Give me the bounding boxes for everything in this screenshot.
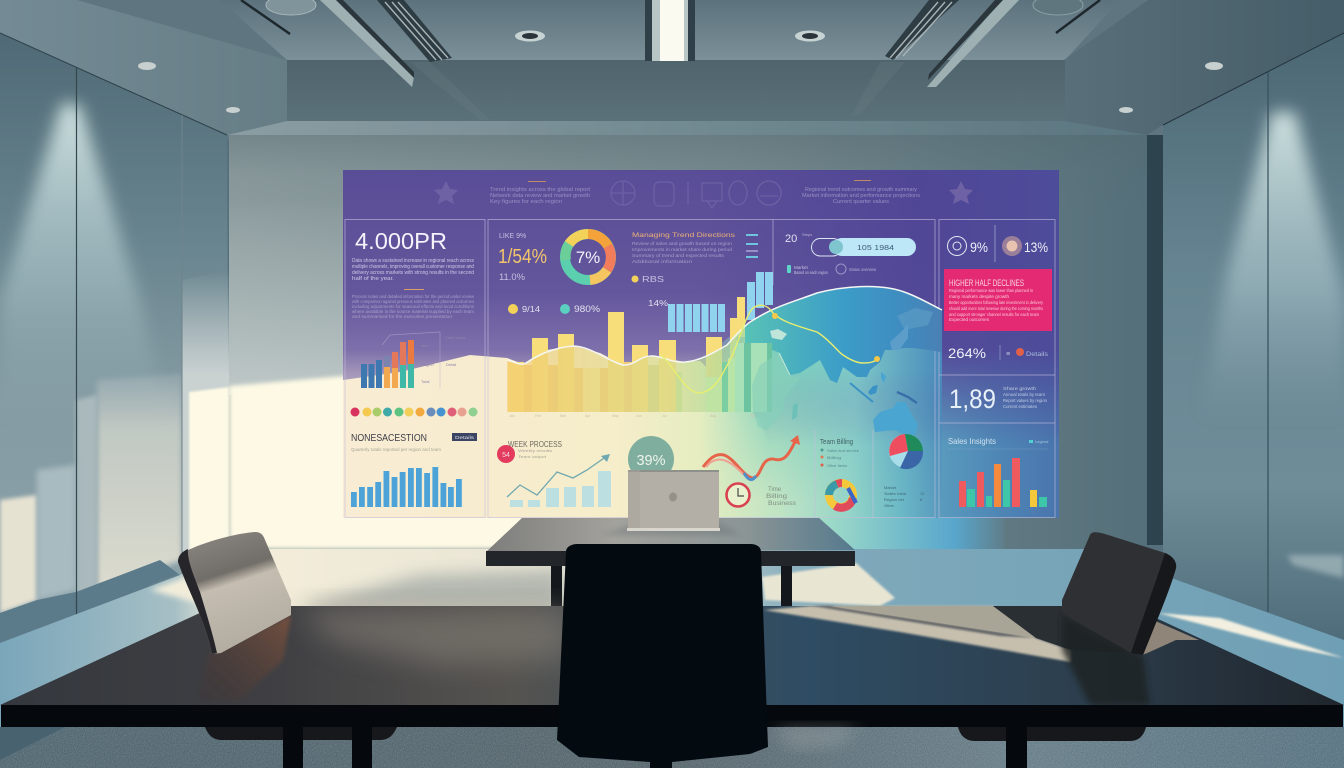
light blue tall bars [747, 272, 773, 320]
left card: headline: including adjustments for seasonal effects and local conditions [352, 304, 475, 309]
left card: headline: half of the year. [352, 276, 395, 282]
back wall [229, 135, 1163, 550]
ceiling downlights [138, 0, 1223, 113]
left wall panels [0, 33, 229, 643]
table legs and under-chair bases [205, 727, 1146, 768]
small data table [884, 485, 925, 508]
pink callout: Better opportunities following late investment in delivery [949, 300, 1044, 305]
pale blue mini bars [668, 304, 725, 332]
left card: mini stacked bar chart [361, 332, 466, 388]
toggle control: 105 1984 [857, 243, 894, 252]
wave arrow chart [703, 435, 800, 480]
legend dots: 980% [574, 304, 600, 314]
axis ticks: Jul [662, 414, 667, 418]
right column: percent icons: 13% [1024, 239, 1048, 255]
small data table: Sales total [884, 491, 906, 496]
right column: 264% stat: Details [1026, 352, 1048, 358]
middle card: top statistic: LIKE 9% [499, 233, 526, 240]
axis ticks: May [612, 414, 619, 418]
pink callout: and support stronger channel results for each team [949, 312, 1039, 317]
left card: headline: with comparison against previous estimates and planned outcomes [352, 299, 475, 304]
left card: headline: delivery across markets with strong results in the second [352, 270, 474, 276]
left card: mini stacked bar chart: Item [421, 343, 429, 348]
header text right [802, 180, 921, 205]
small data table: 12 [920, 491, 925, 496]
time list [766, 487, 796, 507]
time list: Time [768, 487, 782, 493]
laptop [627, 470, 720, 531]
panel frames [345, 219, 1055, 518]
toggle control [785, 232, 916, 275]
left card: lower heading [351, 433, 477, 452]
ceiling light strip [645, 0, 695, 61]
dark yellow bars [524, 362, 659, 412]
panel header band [434, 180, 973, 208]
left card: headline [352, 228, 475, 319]
right column: 1,89 stat: Current estimates [1003, 404, 1038, 409]
ceiling [0, 0, 1344, 140]
white curve [507, 286, 942, 365]
ceiling vents and slots [241, 0, 1100, 87]
right column: 1,89 stat: Report values by region [1003, 398, 1047, 403]
right column: sales bar chart: Legend [1035, 439, 1048, 444]
left card: headline: Process notes and detailed information for the period under review [352, 294, 475, 299]
pink callout [944, 269, 1052, 331]
pink callout: HIGHER HALF DECLINES [949, 278, 1024, 288]
legend dots [508, 275, 668, 314]
legend dots: RBS [642, 275, 664, 284]
right column: 1,89 stat: Share growth [1003, 386, 1037, 391]
time list: Business [768, 501, 796, 507]
axis ticks: Aug [710, 414, 716, 418]
week process chart: 54 [502, 452, 510, 459]
left card: headline: multiple channels, improving overall customer response and [352, 264, 474, 270]
right column: 1,89 stat: 1,89 [949, 384, 996, 414]
middle card: trend directions text: Summary of trend and expected results [632, 253, 725, 258]
clock icon [726, 484, 750, 506]
pink callout: should add more total revenue during the coming months [949, 306, 1044, 311]
axis ticks: Jan [509, 414, 515, 418]
left card: lower heading: Details [455, 435, 475, 440]
header star right [949, 181, 973, 204]
carpet [0, 727, 1344, 768]
multi colour donut [829, 483, 856, 508]
week process chart: Weekly results [518, 448, 552, 453]
axis ticks [509, 414, 756, 418]
legend dots: 14% [648, 299, 668, 308]
small data table: 8 [920, 497, 923, 502]
time list: Billing [766, 494, 787, 500]
axis ticks: Feb [535, 414, 541, 418]
header text left: Trend insights across the global report [490, 187, 591, 193]
left card: lower heading: NONESACESTION [351, 433, 427, 444]
right column: percent icons: 9% [970, 239, 988, 255]
header text right: Regional trend outcomes and growth summary [805, 187, 918, 193]
week process chart [497, 440, 611, 507]
middle card: top statistic: 1/54% [498, 246, 547, 268]
left card: mini stacked bar chart: Chart notes [445, 335, 466, 340]
right column: 1,89 stat [949, 384, 1047, 414]
header text left [490, 181, 591, 205]
axis ticks: Jun [636, 414, 642, 418]
pink callout: Expected outcomes [949, 317, 990, 322]
green bars [676, 343, 772, 412]
header text left: Key figures for each region [490, 199, 562, 205]
axis ticks: Mar [560, 414, 567, 418]
left card: headline: and summarised for the executive presentation [352, 314, 453, 319]
middle card: trend directions text: Improvements in market share during period [632, 247, 733, 252]
team billing list [820, 437, 860, 468]
header text right: Market information and performance projections [802, 193, 921, 199]
small data table: Other [884, 503, 895, 508]
team billing list: Team Billing [820, 437, 853, 446]
week process chart: WEEK PROCESS [508, 440, 562, 449]
table front edge [1, 705, 1343, 727]
toggle control: Based on each region [794, 270, 828, 275]
left card: mini stacked bar chart: Region [421, 362, 434, 367]
right column: sales bar chart: Sales Insights [948, 437, 996, 446]
header text left: Network data review and market growth [490, 193, 590, 199]
donut chart [565, 234, 611, 280]
middle card: trend directions text: Review of sales and growth based on region [632, 241, 733, 246]
pink callout: Regional performance was lower than planned in [949, 288, 1033, 293]
left card: colour dot row [350, 408, 478, 416]
header icons [611, 181, 781, 208]
toggle control: 20 [785, 233, 797, 245]
land mass behind bars [745, 286, 942, 383]
right column: 1,89 stat: Annual totals by team [1003, 392, 1045, 397]
right chair [1062, 532, 1176, 655]
week process chart: Team output [518, 454, 547, 459]
middle card: trend directions text: Managing Trend Directions [632, 232, 736, 239]
left card: headline: Data shows a sustained increase in regional reach across [352, 258, 474, 264]
axis ticks: Apr [585, 414, 591, 418]
donut chart: 7% [576, 248, 600, 267]
left card: lower heading: Quarterly totals reported per region and team [351, 447, 441, 452]
world map [752, 308, 933, 435]
far table [486, 517, 855, 606]
right column: percent icons [948, 236, 1048, 256]
main table top [0, 606, 1344, 727]
main bar and area chart [507, 272, 942, 418]
right column: 264% stat [948, 345, 1048, 361]
yellow bars [508, 297, 745, 412]
team billing list: Billing [827, 455, 841, 460]
small data table: Region net [884, 497, 905, 502]
axis ticks: Sep [750, 414, 756, 418]
left card: headline: where available in the source material supplied by each team [352, 309, 474, 314]
left card: headline: 4.000PR [355, 228, 447, 254]
middle card: trend directions text: Additional information [632, 259, 693, 264]
team billing list: Sales and service [827, 448, 860, 453]
left card: mini stacked bar chart: Detail [446, 362, 456, 367]
area under curve [507, 322, 750, 412]
team billing list: Other items [827, 463, 847, 468]
left card: blue bar chart [351, 467, 462, 507]
39 percent badge: 39% [636, 452, 666, 469]
header text right: Current quarter values [833, 199, 890, 205]
toggle control: Market [794, 265, 809, 270]
small data table: Market [884, 485, 897, 490]
right column: 264% stat: 264% [948, 345, 986, 361]
header star left [434, 181, 458, 204]
projected dashboard panel [343, 170, 1059, 518]
middle card: top statistic [498, 233, 547, 282]
legend dots: 9/14 [522, 305, 541, 314]
reflection of sunlight on glass [97, 374, 182, 590]
39 percent badge [628, 436, 674, 482]
right column: sales bar chart [948, 437, 1048, 507]
toggle control: Steps [802, 232, 812, 237]
panel background [343, 170, 1059, 518]
right column: 264% stat: ≡ [1006, 351, 1010, 358]
pink callout: many markets despite growth [949, 294, 1010, 299]
middle card: top statistic: 11.0% [499, 272, 525, 282]
pie chart [889, 434, 923, 469]
right wall panels [1163, 33, 1344, 640]
middle card: trend directions text [632, 232, 758, 264]
floor [0, 549, 1344, 730]
yellow route line [660, 305, 880, 393]
left chair [178, 532, 291, 654]
left card: mini stacked bar chart: Total [421, 379, 430, 384]
toggle control: Status overview [849, 267, 877, 272]
centre chair [557, 544, 768, 768]
